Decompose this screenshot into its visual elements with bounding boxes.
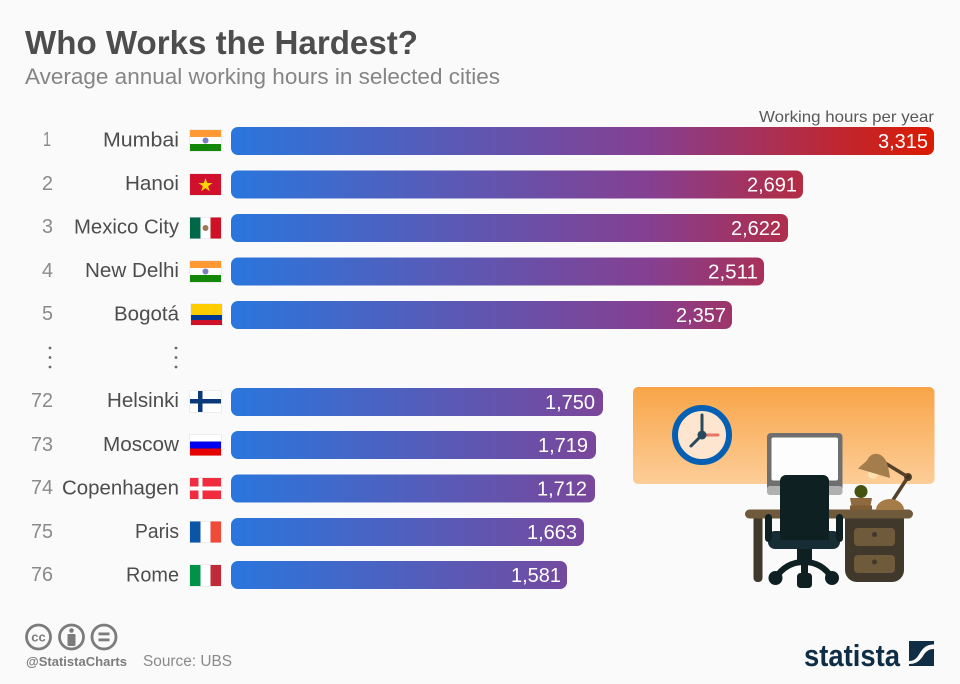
plant [850, 485, 872, 510]
row: Rome: 1,581 [511, 564, 561, 587]
row: Moscow: 1,719 [538, 434, 588, 457]
row: Bogotá: 2,357 [676, 304, 726, 327]
row: Copenhagen [31, 474, 595, 502]
credit: handle: @StatistaCharts [26, 655, 127, 669]
icon: clock [675, 408, 729, 462]
row: Mumbai: 3,315 [878, 130, 928, 153]
row: Mumbai [43, 127, 934, 155]
row: Hanoi: Hanoi [125, 172, 179, 195]
row: New Delhi: 2,511 [708, 260, 758, 284]
row: Copenhagen: Copenhagen [62, 476, 179, 500]
row: Hanoi: 2,691 [747, 174, 797, 196]
row: Hanoi: 2 [42, 172, 53, 195]
row: Rome: Rome [126, 564, 179, 586]
logo: statista: statista [804, 638, 901, 673]
row: Copenhagen: 74 [31, 476, 53, 499]
row: Mexico City: Mexico City [74, 216, 180, 238]
row: Rome [31, 561, 567, 589]
row: Moscow [31, 431, 596, 459]
office chair [765, 475, 843, 588]
row: Mexico City: 2,622 [731, 217, 781, 240]
row: Paris: 75 [31, 520, 53, 543]
row: Copenhagen: 1,712 [537, 478, 587, 500]
row: Rome: 76 [31, 563, 53, 586]
row: Bogotá [42, 301, 732, 329]
row: Helsinki: 72 [31, 389, 53, 412]
row: New Delhi: 4 [42, 259, 53, 282]
row: Hanoi [42, 170, 803, 198]
row: Paris: Paris [135, 520, 179, 543]
row: Helsinki: 1,750 [545, 391, 595, 414]
row: Mexico City [42, 214, 788, 242]
title: Who Works the Hardest? [25, 24, 418, 61]
row: Mexico City: 3 [42, 215, 53, 238]
icons: creative commons licence [26, 625, 116, 649]
row: Helsinki: Helsinki [107, 389, 179, 412]
row: Moscow: 73 [31, 433, 53, 456]
row: Paris [31, 518, 584, 546]
subtitle: Average annual working hours in selected cities [25, 64, 500, 89]
ellipsis: skipped ranks [49, 347, 177, 368]
row: Mumbai: 1 [43, 128, 51, 151]
axis label: Working hours per year [759, 109, 935, 126]
desk lamp [858, 454, 911, 510]
illustration: office desk [633, 387, 934, 588]
monitor [767, 433, 842, 495]
row: Bogotá: 5 [42, 302, 53, 325]
row: Paris: 1,663 [527, 521, 577, 544]
row: New Delhi [42, 258, 764, 286]
source: Source: UBS [143, 653, 232, 670]
desk [745, 510, 913, 582]
row: Helsinki [31, 388, 603, 416]
row: Bogotá: Bogotá [114, 302, 180, 326]
wall panel [633, 387, 934, 484]
row: New Delhi: New Delhi [85, 259, 179, 282]
icons: creative commons licence: cc [31, 630, 46, 644]
row: Mumbai: Mumbai [103, 128, 179, 152]
row: Moscow: Moscow [103, 433, 179, 456]
